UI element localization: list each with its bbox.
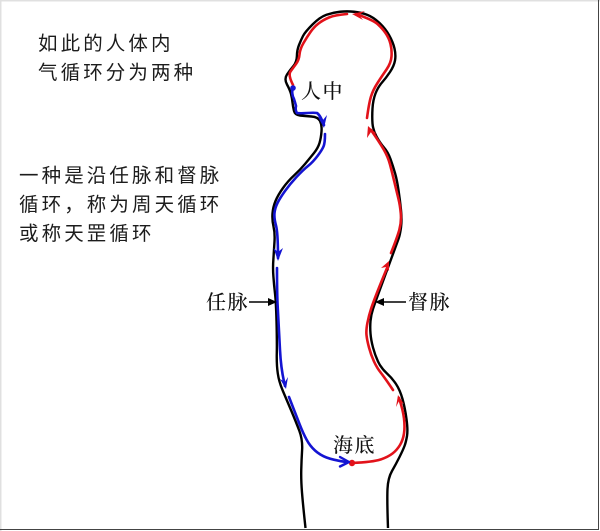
label: 督脉 with pointer: 督脉 [408, 291, 451, 314]
intro text: 如此的人体内 [38, 33, 174, 55]
label: 海底: 海底 [333, 434, 376, 457]
arrowhead: red over head [352, 11, 365, 20]
description text: 一种是沿任脉和督脉 [19, 165, 222, 187]
red governor vessel path [290, 11, 404, 466]
body outline [272, 11, 407, 528]
description text: 循环，称为周天循环 [19, 194, 222, 216]
arrowhead: red rising at buttock [396, 395, 404, 407]
label: 任脉 with pointer [206, 291, 277, 314]
arrowhead: blue at chin [318, 115, 327, 128]
arrowhead: blue at chest [274, 248, 283, 261]
description text [19, 165, 222, 245]
intro text: 气循环分为两种 [38, 62, 196, 84]
label: 人中: 人中 [301, 80, 344, 103]
arrowhead: red rising at neck [367, 126, 377, 138]
arrowhead: blue at perineum [340, 457, 349, 466]
description text: 或称天罡循环 [19, 223, 155, 245]
blue conception vessel path [274, 85, 349, 466]
label: 任脉 with pointer: 任脉 [206, 291, 249, 314]
intro text [38, 33, 196, 84]
point: sea floor [349, 460, 355, 466]
point: philtrum [290, 85, 296, 91]
arrowhead: blue at abdomen [280, 377, 288, 389]
label: 督脉 with pointer [375, 291, 451, 314]
arrowhead: red rising at waist [381, 261, 389, 271]
